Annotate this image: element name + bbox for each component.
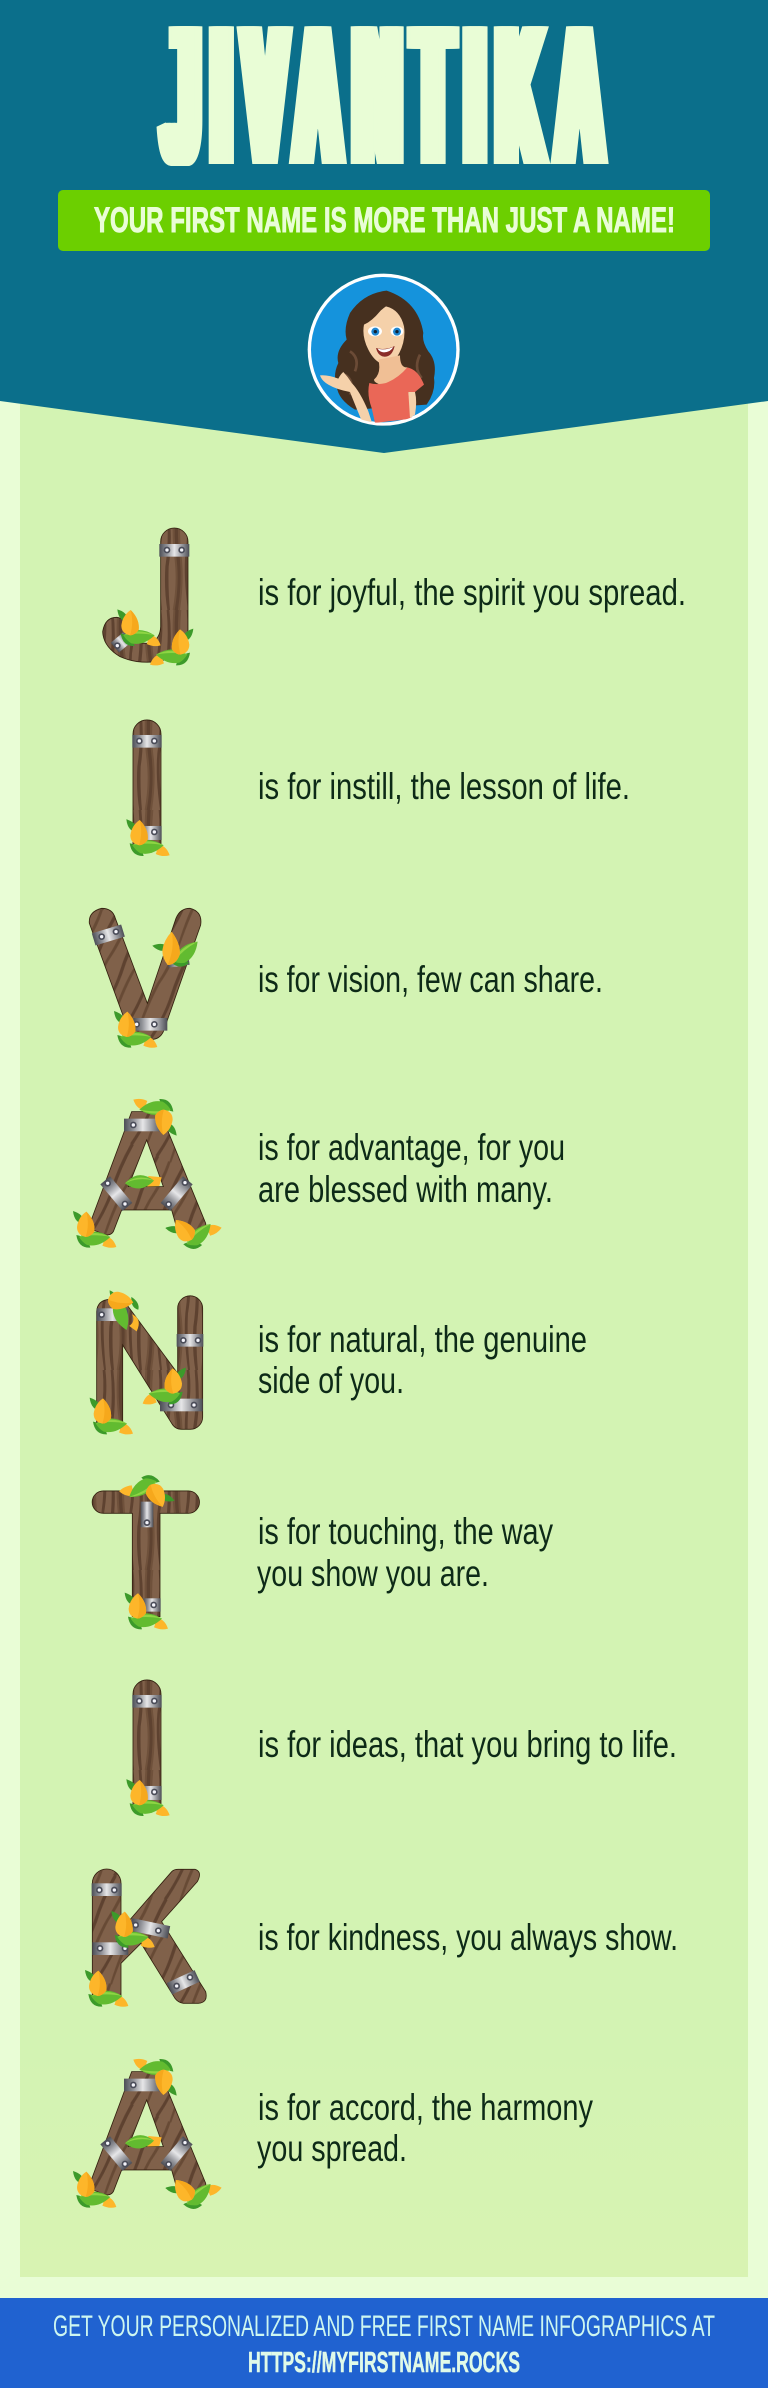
letter J <box>103 528 193 665</box>
text: T lines <box>257 1511 553 1594</box>
letter N <box>90 1287 203 1434</box>
text: N lines: is for natural, the genuine <box>258 1319 587 1360</box>
text: N lines: side of you. <box>258 1360 404 1401</box>
letter A <box>73 1099 222 1256</box>
letter T <box>92 1469 199 1629</box>
letter V <box>89 908 204 1048</box>
text: A lines (second) <box>257 2087 593 2169</box>
header banner <box>0 0 768 453</box>
letter K <box>85 1869 206 2007</box>
text: A lines <box>258 1127 565 1210</box>
footer band <box>0 2298 768 2388</box>
letter I <box>126 720 170 856</box>
footer band: HTTPS://MYFIRSTNAME.ROCKS <box>248 2347 520 2379</box>
tagline bar <box>58 190 710 251</box>
text: T lines: you show you are. <box>257 1553 489 1594</box>
text: N lines <box>258 1319 587 1401</box>
text: A lines: are blessed with many. <box>258 1169 553 1210</box>
text: A lines (second): is for accord, the harmony <box>258 2087 593 2128</box>
text: A lines (second): you spread. <box>257 2128 407 2169</box>
avatar: woman in circle <box>308 274 460 426</box>
text: V line: is for vision, few can share. <box>258 959 603 1000</box>
letter A (second) <box>73 2059 222 2216</box>
text: T lines: is for touching, the way <box>258 1511 553 1552</box>
text: I line: is for instill, the lesson of life. <box>258 766 630 807</box>
letter I (second) <box>126 1680 170 1816</box>
text: A lines: is for advantage, for you <box>258 1127 565 1168</box>
